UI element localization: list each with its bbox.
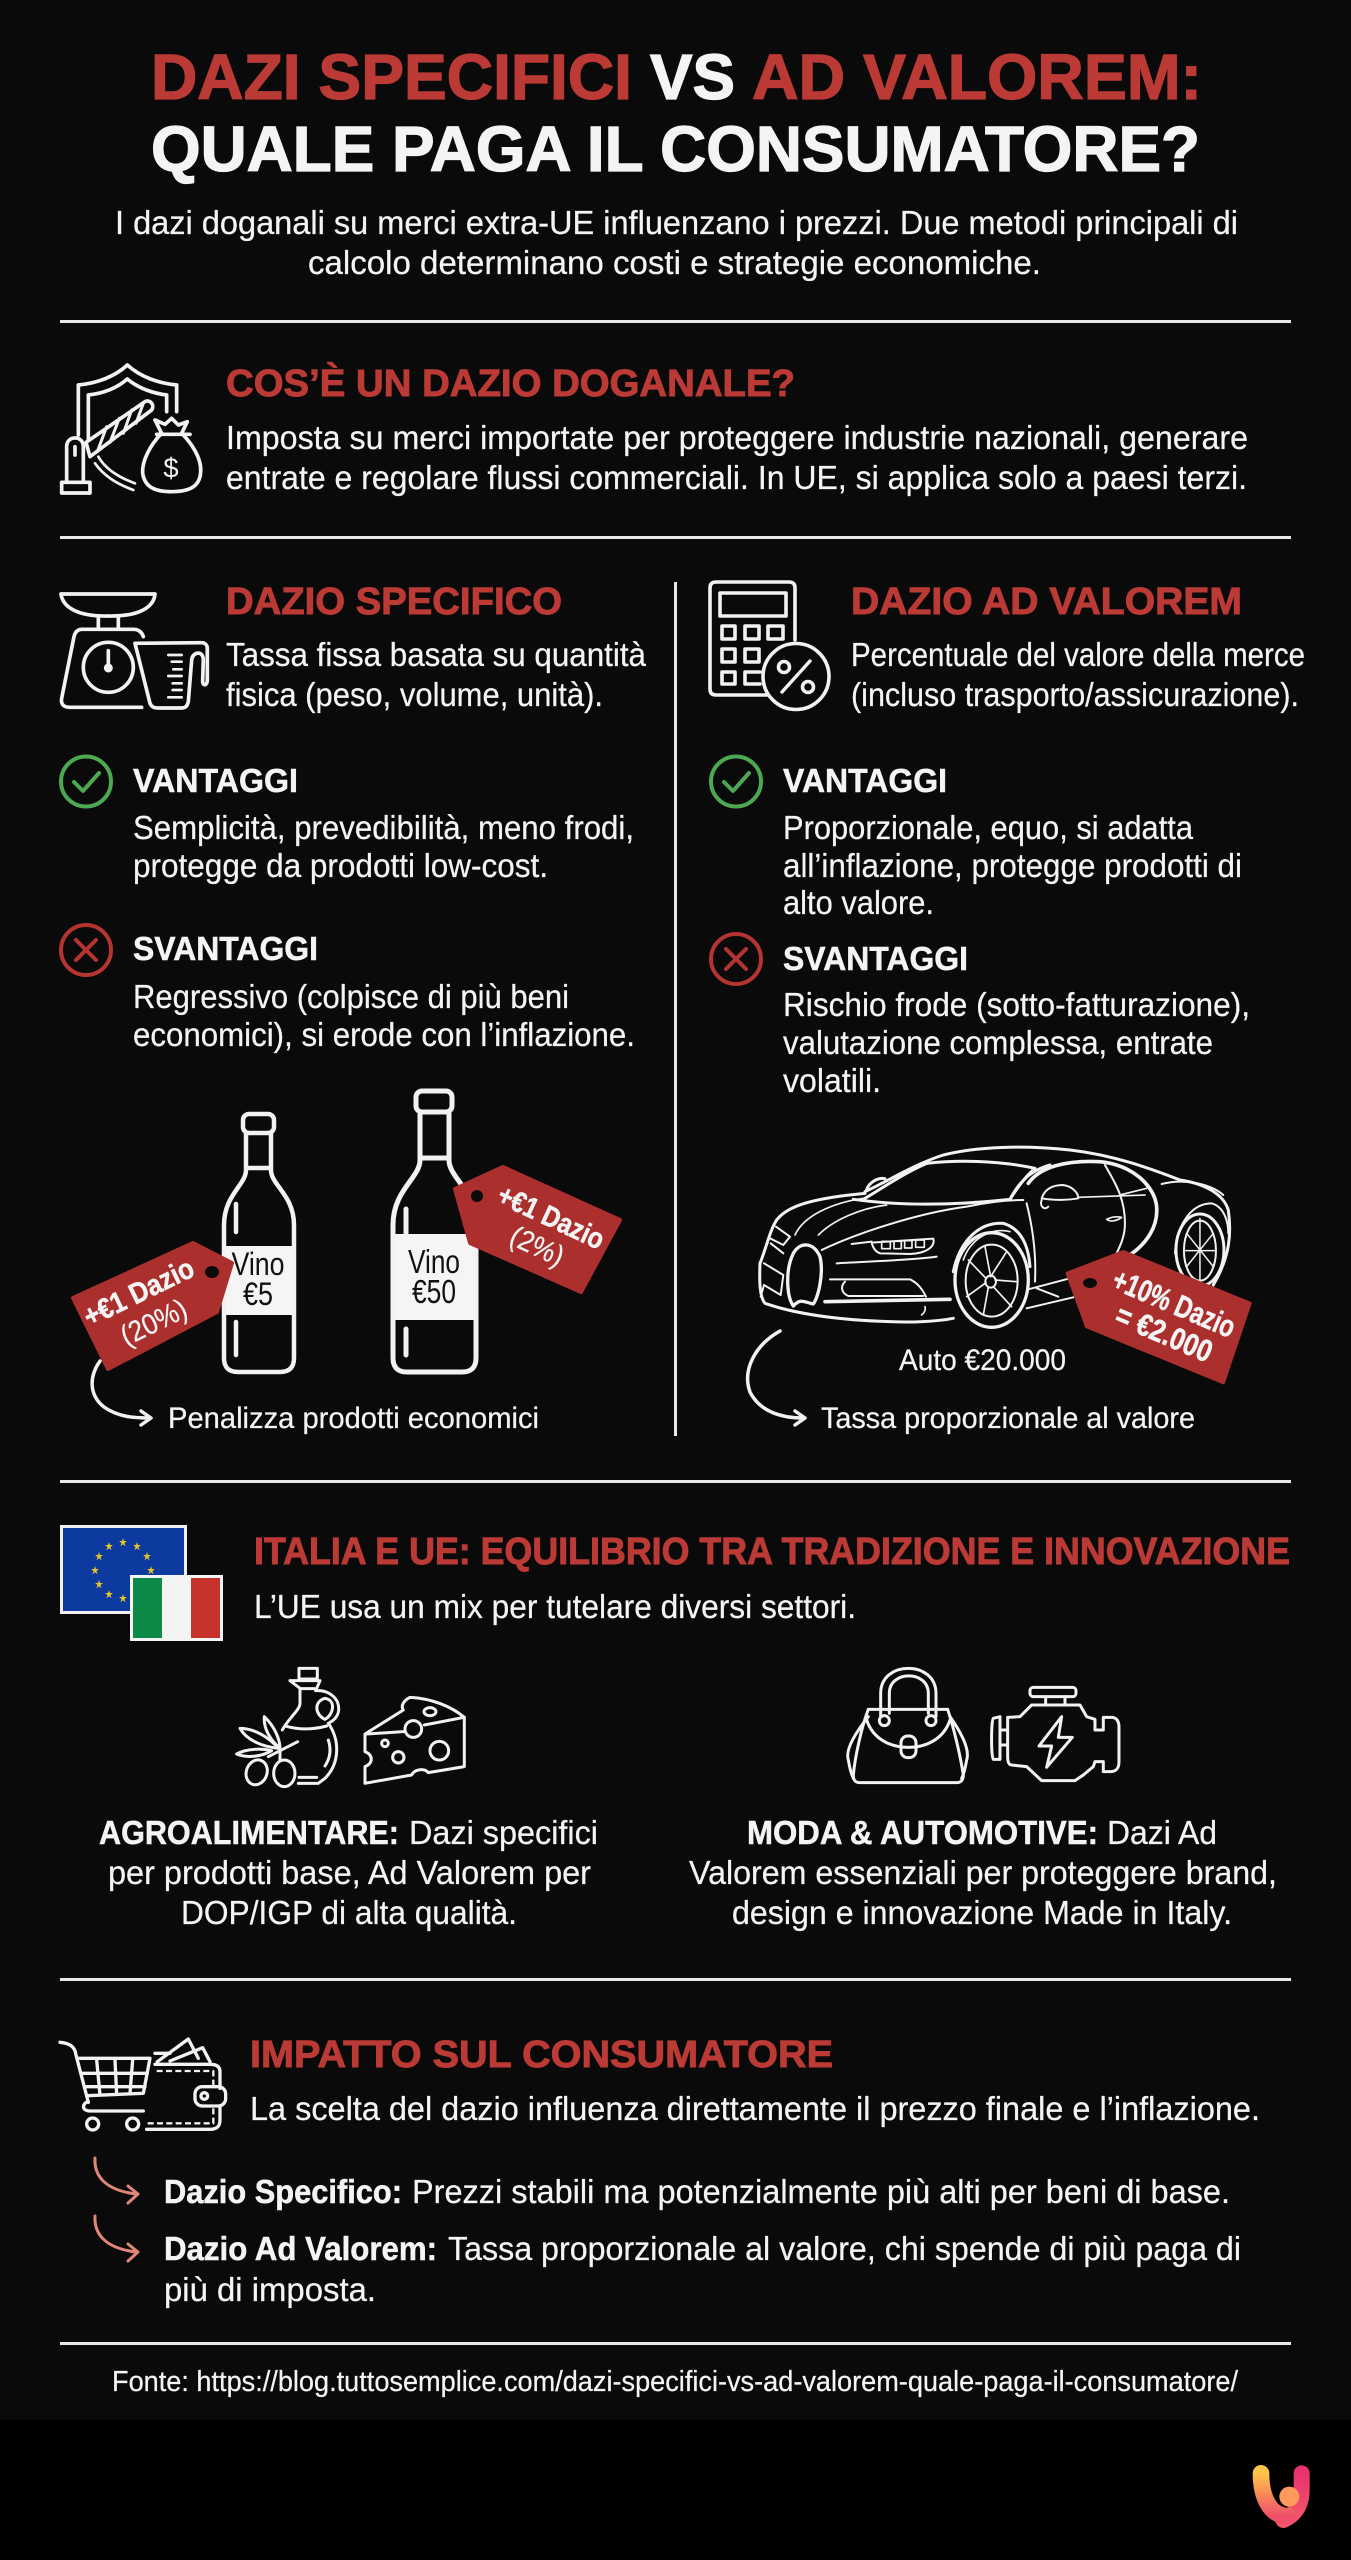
illustration: wine bottle 5 euro: €5 [243,1276,273,1312]
caption: Tassa proporzionale al valore [821,1402,1195,1435]
arrow [92,1361,151,1425]
arrow: bullet 2 [95,2216,138,2261]
svantaggi: volatili. [783,1062,881,1099]
title: VS [650,41,735,113]
icon: calculator with percent [710,582,829,710]
bullet: dazio specifico: Dazio Specifico: [164,2173,402,2210]
svantaggi: valutazione complessa, entrate [783,1024,1213,1061]
text: agroalimentare [99,1814,598,1931]
panel: cos'è un dazio doganale [62,361,1248,496]
bullet: dazio ad valorem: Dazio Ad Valorem: [164,2230,437,2267]
car price label: Auto €20.000 [899,1344,1066,1377]
bullet: dazio ad valorem [164,2230,1241,2308]
arrow [748,1331,805,1425]
illustration: wine bottle 5 euro [224,1114,294,1372]
icon: olive oil and olives [237,1668,339,1788]
svantaggi [133,930,635,1053]
illustration: sports car [760,1147,1230,1327]
vantaggi: VANTAGGI [783,762,947,799]
panel: dazio specifico [61,581,647,1435]
text: agroalimentare: DOP/IGP di alta qualità. [181,1894,517,1931]
vantaggi: alto valore. [783,884,934,921]
heading: IMPATTO SUL CONSUMATORE [250,2034,833,2076]
text: moda e automotive: MODA & AUTOMOTIVE: [747,1814,1098,1851]
svantaggi [783,940,1250,1099]
heading: DAZIO SPECIFICO [226,581,562,623]
title: QUALE PAGA IL CONSUMATORE? [151,113,1200,185]
price tag: +10% [1067,1252,1250,1383]
vantaggi: all’inflazione, protegge prodotti di [783,847,1242,884]
vantaggi: VANTAGGI [133,762,298,799]
vantaggi [133,762,634,884]
text: moda e automotive [689,1814,1277,1931]
vantaggi: protegge da prodotti low-cost. [133,847,548,884]
icon: shield barrier and money bag [62,365,201,493]
intro text: calcolo determinano costi e strategie economiche. [308,244,1041,281]
title [151,41,1202,185]
icon: cross [711,934,761,984]
illustration: wine bottle 50 euro: €50 [412,1273,456,1310]
bullet: dazio specifico: Prezzi stabili ma potenzialmente più alti per beni di base. [412,2173,1230,2210]
panel: impatto sul consumatore [60,2034,1260,2308]
price tag: +10%: +10% Dazio [1107,1262,1241,1345]
text: moda e automotive: Dazi Ad [1107,1814,1217,1851]
text block: entrate e regolare flussi commerciali. In UE, si applica solo a paesi terzi. [226,459,1247,496]
icon: EU flag [62,1526,186,1612]
arrow: bullet 1 [95,2158,138,2203]
source line: Fonte: https://blog.tuttosemplice.com/dazi-specifici-vs-ad-valorem-quale-paga-il-consumatore/ [112,2366,1239,2398]
intro text [115,204,1238,281]
vantaggi: Proporzionale, equo, si adatta [783,809,1194,846]
icon: Italian flag [130,1575,223,1641]
svantaggi: economici), si erode con l’inflazione. [133,1016,635,1053]
icon: check [711,756,761,806]
text block: La scelta del dazio influenza direttamente il prezzo finale e l’inflazione. [250,2090,1260,2127]
intro text: I dazi doganali su merci extra-UE influenzano i prezzi. Due metodi principali di [115,204,1238,241]
icon: engine [992,1687,1119,1781]
svantaggi: SVANTAGGI [783,940,968,977]
price tag: +1 euro 2%: (2%) [505,1221,569,1273]
panel: dazio ad valorem [710,581,1305,1435]
panel: italia e ue [62,1526,1290,1931]
price tag: +1 euro 2%: +€1 Dazio [492,1179,609,1256]
heading: COS’È UN DAZIO DOGANALE? [226,361,795,405]
icon: cheese [365,1697,464,1783]
illustration: wine bottle 5 euro: Vino [232,1246,284,1282]
illustration: wine bottle 50 euro: Vino [408,1243,460,1280]
text: agroalimentare: per prodotti base, Ad Valorem per [108,1854,591,1891]
heading: ITALIA E UE: EQUILIBRIO TRA TRADIZIONE E INNOVAZIONE [254,1531,1290,1573]
bullet: dazio ad valorem: più di imposta. [164,2271,376,2308]
logo [1261,2473,1302,2520]
definition: Tassa fissa basata su quantità [226,636,647,673]
title: DAZI SPECIFICI [151,41,632,113]
icon: cross [61,925,111,975]
definition: Percentuale del valore della merce [851,636,1305,673]
caption: Penalizza prodotti economici [168,1402,539,1435]
definition: (incluso trasporto/assicurazione). [851,676,1299,713]
price tag: +1 euro 20%: +€1 Dazio [79,1252,200,1333]
text: agroalimentare: Dazi specifici [409,1814,598,1851]
price tag: +1 euro 2% [455,1167,620,1292]
icon: shopping cart and wallet [60,2039,226,2130]
icon: handbag [848,1668,967,1783]
illustration: wine bottle 50 euro [393,1091,476,1372]
vantaggi [783,762,1242,921]
svantaggi: Regressivo (colpisce di più beni [133,978,569,1015]
text: agroalimentare: AGROALIMENTARE: [99,1814,399,1851]
price tag: +1 euro 20%: (20%) [116,1293,193,1353]
price tag: +1 euro 20% [73,1243,232,1369]
definition [851,636,1305,713]
svantaggi: Rischio frode (sotto-fatturazione), [783,986,1250,1023]
bullet: dazio ad valorem: Tassa proporzionale al valore, chi spende di più paga di [448,2230,1241,2267]
price tag: +10%: = €2.000 [1110,1297,1218,1369]
text: moda e automotive: Valorem essenziali per proteggere brand, [689,1854,1277,1891]
icon: kitchen scale and measuring jug [61,594,207,708]
text block: Imposta su merci importate per proteggere industrie nazionali, generare [226,419,1248,456]
vantaggi: Semplicità, prevedibilità, meno frodi, [133,809,634,846]
svantaggi: SVANTAGGI [133,930,318,967]
subheading: L’UE usa un mix per tutelare diversi settori. [254,1588,856,1625]
heading: DAZIO AD VALOREM [851,581,1242,623]
text block [226,419,1248,496]
title: AD VALOREM: [752,41,1202,113]
definition [226,636,647,713]
icon: check [61,756,111,806]
icon: shield barrier and money bag: $ [163,453,179,484]
definition: fisica (peso, volume, unità). [226,676,603,713]
text: moda e automotive: design e innovazione Made in Italy. [732,1894,1232,1931]
